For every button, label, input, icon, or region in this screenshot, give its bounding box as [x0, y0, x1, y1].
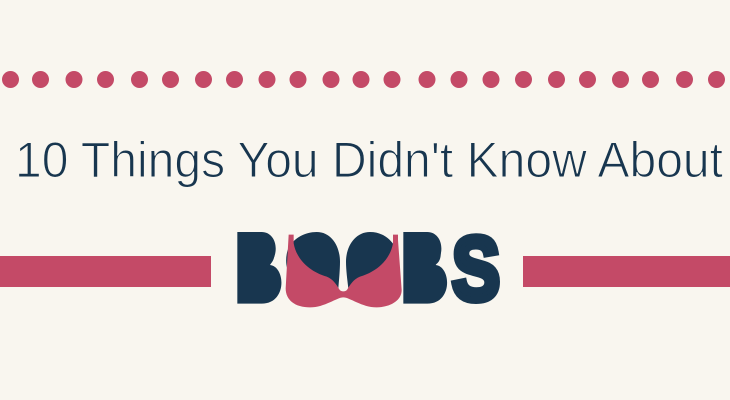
dotted divider — [2, 71, 725, 88]
logo word: B — [400, 223, 446, 313]
logo: BOOBS — [234, 219, 500, 319]
icon: bra over breasts — [237, 232, 447, 307]
logo word: S — [452, 219, 500, 319]
left bar — [0, 256, 211, 287]
title: 10 Things You Didn't Know About — [15, 132, 723, 188]
logo word: O — [350, 226, 388, 293]
right bar — [523, 256, 730, 287]
logo word: O — [295, 226, 333, 293]
logo word: B — [234, 223, 280, 313]
